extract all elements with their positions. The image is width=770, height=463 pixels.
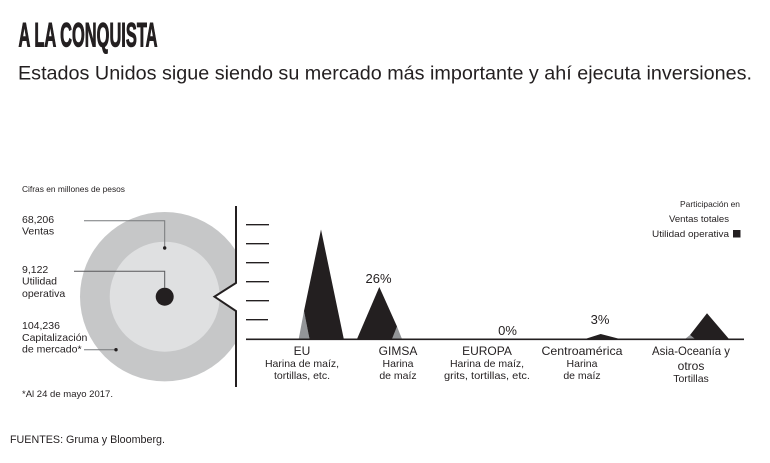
text: A LA CONQUISTA (18, 16, 158, 54)
subtitle: Estados Unidos sigue siendo su mercado más importante y ahí ejecuta inversiones. (18, 62, 752, 84)
category: EU (265, 344, 339, 382)
category: Centroamerica: Centroamérica (542, 344, 623, 358)
units note: Cifras en millones de pesos (22, 184, 125, 194)
category: GIMSA (379, 344, 417, 382)
label: capitalizacion de mercado: Capitalización (22, 332, 88, 344)
category: Asia-Oceania: otros (678, 359, 704, 373)
triangle: EU (299, 230, 344, 339)
legend: Participación en (680, 199, 740, 209)
category: EU: tortillas, etc. (274, 370, 330, 382)
value labels (365, 271, 610, 338)
label: capitalizacion de mercado: 104,236 (22, 320, 60, 332)
category: Asia-Oceania: Asia-Oceanía y (652, 344, 730, 358)
category: Centroamerica (542, 344, 623, 382)
label: capitalizacion de mercado (22, 320, 118, 356)
value labels: 26% (365, 271, 392, 286)
category: Europa: Harina de maíz, (450, 358, 524, 370)
concentric circles chart (80, 200, 260, 390)
axis ticks (246, 225, 269, 320)
category: Europa: EUROPA (462, 344, 512, 358)
label: ventas: Ventas (22, 226, 54, 238)
label: utilidad operativa: operativa (22, 288, 65, 300)
category: Europa: grits, tortillas, etc. (444, 370, 530, 382)
label: capitalizacion de mercado: de mercado* (22, 344, 82, 356)
legend: Ventas totales (669, 214, 729, 225)
baseline (246, 338, 744, 340)
category: Europa (444, 344, 530, 382)
sources: FUENTES: Gruma y Bloomberg. (10, 434, 165, 446)
legend: Utilidad operativa (652, 229, 730, 240)
category: Asia-Oceania (652, 344, 730, 385)
label: ventas: 68,206 (22, 214, 54, 226)
category: EU: EU (294, 344, 310, 358)
category: GIMSA: de maíz (379, 370, 417, 382)
label: utilidad operativa: 9,122 (22, 264, 48, 276)
triangle: GIMSA (357, 287, 402, 339)
category: GIMSA: GIMSA (379, 344, 417, 358)
footnote: *Al 24 de mayo 2017. (22, 389, 113, 400)
category: EU: Harina de maíz, (265, 358, 339, 370)
triangle: Centroamerica (585, 334, 620, 339)
category: Centroamerica: Harina (567, 358, 598, 370)
label: utilidad operativa: Utilidad (22, 276, 57, 288)
label: utilidad operativa (22, 264, 165, 300)
label: ventas (22, 214, 166, 250)
legend (652, 199, 740, 240)
category: Asia-Oceania: Tortillas (673, 373, 709, 385)
category: GIMSA: Harina (383, 358, 414, 370)
value labels: 3% (591, 312, 610, 327)
triangle: Asia-Oceania (685, 313, 729, 339)
value labels: 0% (498, 323, 517, 338)
category: Centroamerica: de maíz (563, 370, 601, 382)
